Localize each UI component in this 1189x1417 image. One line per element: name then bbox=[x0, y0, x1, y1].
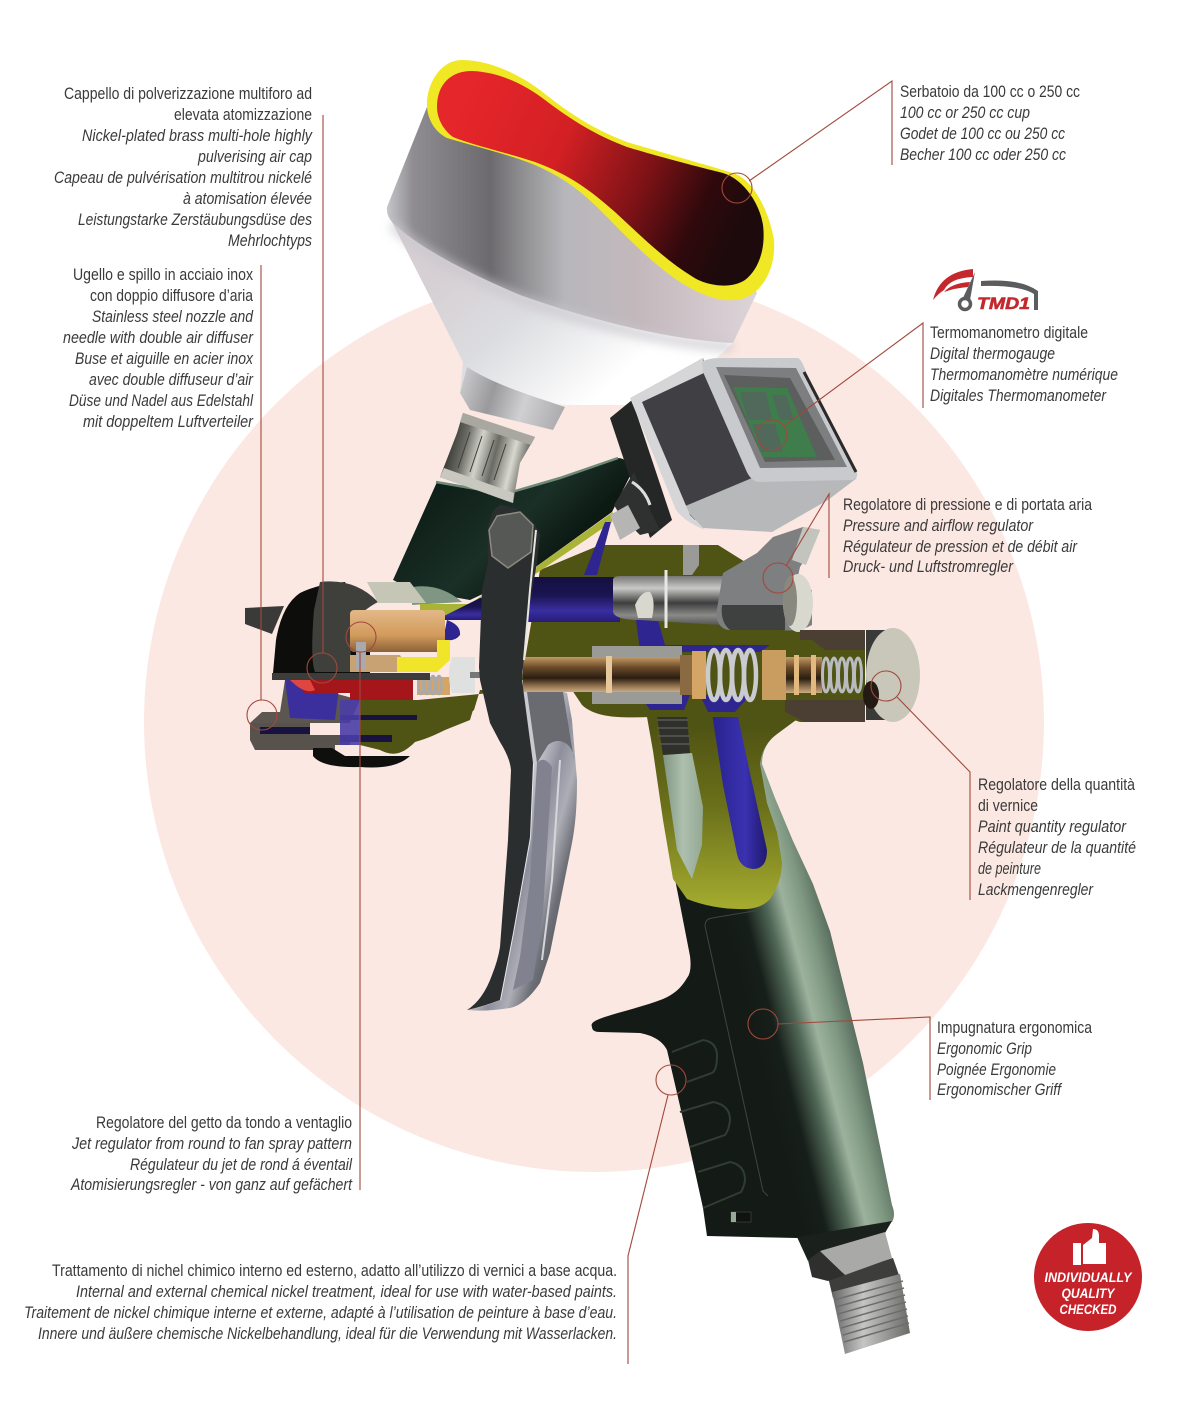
text: jet regulator: Jet regulator from round to fan spray pattern bbox=[71, 1134, 352, 1153]
text: air cap: à atomisation élevée bbox=[183, 189, 312, 208]
text: air cap: Cappello di polverizzazione multiforo ad bbox=[64, 84, 312, 103]
text: jet regulator: Régulateur du jet de rond á éventail bbox=[130, 1155, 353, 1174]
callout leader: air cap bbox=[307, 115, 337, 683]
TMD1 logo: TMD1 bbox=[977, 294, 1030, 313]
fluid nozzle and air cap bbox=[245, 581, 482, 768]
text: chemical nickel treatment: Internal and external chemical nickel treatment, ideal for use with water-based paints. bbox=[76, 1282, 617, 1301]
text: paint regulator: de peinture bbox=[978, 859, 1041, 878]
fluid cup bbox=[387, 60, 774, 430]
text: nozzle and needle: Stainless steel nozzle and bbox=[92, 307, 253, 326]
text: air cap: Leistungstarke Zerstäubungsdüse des bbox=[78, 210, 312, 229]
paint quantity knob bbox=[863, 628, 920, 722]
text: chemical nickel treatment bbox=[24, 1261, 617, 1343]
text: air cap bbox=[54, 84, 313, 250]
regulator lock nut bbox=[610, 472, 660, 540]
text: thermogauge: Termomanometro digitale bbox=[930, 323, 1088, 342]
icon: thumbs up bbox=[1073, 1229, 1106, 1265]
callout leader: paint regulator bbox=[871, 671, 970, 900]
text: jet regulator bbox=[70, 1113, 353, 1194]
text: air cap: Mehrlochtyps bbox=[228, 231, 312, 250]
text: paint regulator: Regolatore della quantità bbox=[978, 775, 1135, 794]
thermogauge screen bbox=[733, 387, 817, 457]
olive body section bbox=[360, 545, 865, 754]
callout leader: cup bbox=[722, 81, 892, 203]
spray gun illustration bbox=[245, 60, 920, 1354]
badge label: CHECKED bbox=[1060, 1301, 1116, 1317]
quality badge bbox=[1034, 1223, 1142, 1331]
text: nozzle and needle bbox=[63, 265, 254, 431]
text: paint regulator: Régulateur de la quantité bbox=[978, 838, 1136, 857]
text: cup: Serbatoio da 100 cc o 250 cc bbox=[900, 82, 1080, 101]
text: air cap: pulverising air cap bbox=[197, 147, 312, 166]
text: nozzle and needle: Düse und Nadel aus Edelstahl bbox=[69, 391, 254, 410]
text: paint regulator: Paint quantity regulator bbox=[978, 817, 1127, 836]
callout leader: thermogauge bbox=[757, 323, 923, 450]
text: paint regulator: Lackmengenregler bbox=[978, 880, 1094, 899]
text: chemical nickel treatment: Trattamento di nichel chimico interno ed esterno, adatto all’utilizzo di vernici a base acqua. bbox=[52, 1261, 617, 1280]
needle assembly bbox=[523, 630, 865, 722]
text: air cap: elevata atomizzazione bbox=[174, 105, 312, 124]
TMD1 logo bbox=[933, 269, 1038, 313]
text: nozzle and needle: mit doppeltem Luftverteiler bbox=[83, 412, 254, 431]
callout leader: chemical nickel treatment bbox=[628, 1065, 686, 1364]
text: air cap: Capeau de pulvérisation multitrou nickelé bbox=[54, 168, 312, 187]
text: grip bbox=[937, 1018, 1092, 1099]
threaded air inlet fitting bbox=[797, 1221, 910, 1354]
text: chemical nickel treatment: Innere und äußere chemische Nickelbehandlung, ideal für die Verwendung mit Wasserlacken. bbox=[38, 1324, 617, 1343]
text: pressure regulator: Druck- und Luftstromregler bbox=[843, 557, 1014, 576]
callout leader: jet regulator bbox=[346, 622, 376, 1190]
digital thermogauge bbox=[610, 358, 857, 538]
text: thermogauge: Digitales Thermomanometer bbox=[930, 386, 1107, 405]
badge label bbox=[1044, 1269, 1133, 1317]
trigger arm bbox=[467, 505, 540, 1010]
text: cup: Becher 100 cc oder 250 cc bbox=[900, 145, 1066, 164]
text: jet regulator: Atomisierungsregler - von ganz auf gefächert bbox=[70, 1175, 353, 1194]
text: grip: Poignée Ergonomie bbox=[937, 1060, 1056, 1079]
text: paint regulator bbox=[978, 775, 1136, 899]
text: air cap: Nickel-plated brass multi-hole highly bbox=[82, 126, 313, 145]
handle cutaway bbox=[647, 700, 800, 909]
air channels bbox=[440, 522, 770, 712]
cup interior bbox=[437, 71, 764, 286]
badge label: QUALITY bbox=[1062, 1285, 1116, 1301]
text: thermogauge: Digital thermogauge bbox=[930, 344, 1055, 363]
text: nozzle and needle: Buse et aiguille en acier inox bbox=[75, 349, 253, 368]
text: nozzle and needle: con doppio diffusore d’aria bbox=[90, 286, 253, 305]
text: cup: 100 cc or 250 cc cup bbox=[900, 103, 1030, 122]
text: chemical nickel treatment: Traitement de nickel chimique interne et externe, adapté à l’utilisation de peinture à base d’eau. bbox=[24, 1303, 617, 1322]
trigger blade bbox=[467, 680, 577, 1011]
callout leader: grip bbox=[748, 1009, 930, 1100]
text: cup: Godet de 100 cc ou 250 cc bbox=[900, 124, 1065, 143]
top casting bbox=[393, 458, 632, 620]
air valve piston and regulator wing bbox=[613, 527, 820, 632]
text: nozzle and needle: avec double diffuseur d’air bbox=[89, 370, 254, 389]
text: grip: Impugnatura ergonomica bbox=[937, 1018, 1092, 1037]
text: thermogauge: Thermomanomètre numérique bbox=[930, 365, 1118, 384]
callout leader: nozzle bbox=[247, 265, 277, 730]
background circle bbox=[144, 272, 1044, 1172]
text: grip: Ergonomischer Griff bbox=[937, 1080, 1063, 1099]
text: thermogauge bbox=[930, 323, 1118, 405]
text: paint regulator: di vernice bbox=[978, 796, 1038, 815]
text: pressure regulator bbox=[843, 495, 1092, 576]
text: pressure regulator: Pressure and airflow regulator bbox=[843, 516, 1034, 535]
callout leader: pressure regulator bbox=[763, 494, 829, 593]
gun grip bbox=[592, 717, 894, 1238]
badge label: INDIVIDUALLY bbox=[1044, 1269, 1133, 1285]
text: grip: Ergonomic Grip bbox=[937, 1039, 1032, 1058]
fluid cup neck bbox=[440, 413, 535, 503]
text: pressure regulator: Régulateur de pression et de débit air bbox=[843, 537, 1078, 556]
text: nozzle and needle: needle with double air diffuser bbox=[63, 328, 254, 347]
text: pressure regulator: Regolatore di pressione e di portata aria bbox=[843, 495, 1092, 514]
text: cup bbox=[900, 82, 1080, 164]
trigger pivot bolt bbox=[489, 512, 533, 568]
text: jet regulator: Regolatore del getto da tondo a ventaglio bbox=[96, 1113, 352, 1132]
text: nozzle and needle: Ugello e spillo in acciaio inox bbox=[73, 265, 253, 284]
